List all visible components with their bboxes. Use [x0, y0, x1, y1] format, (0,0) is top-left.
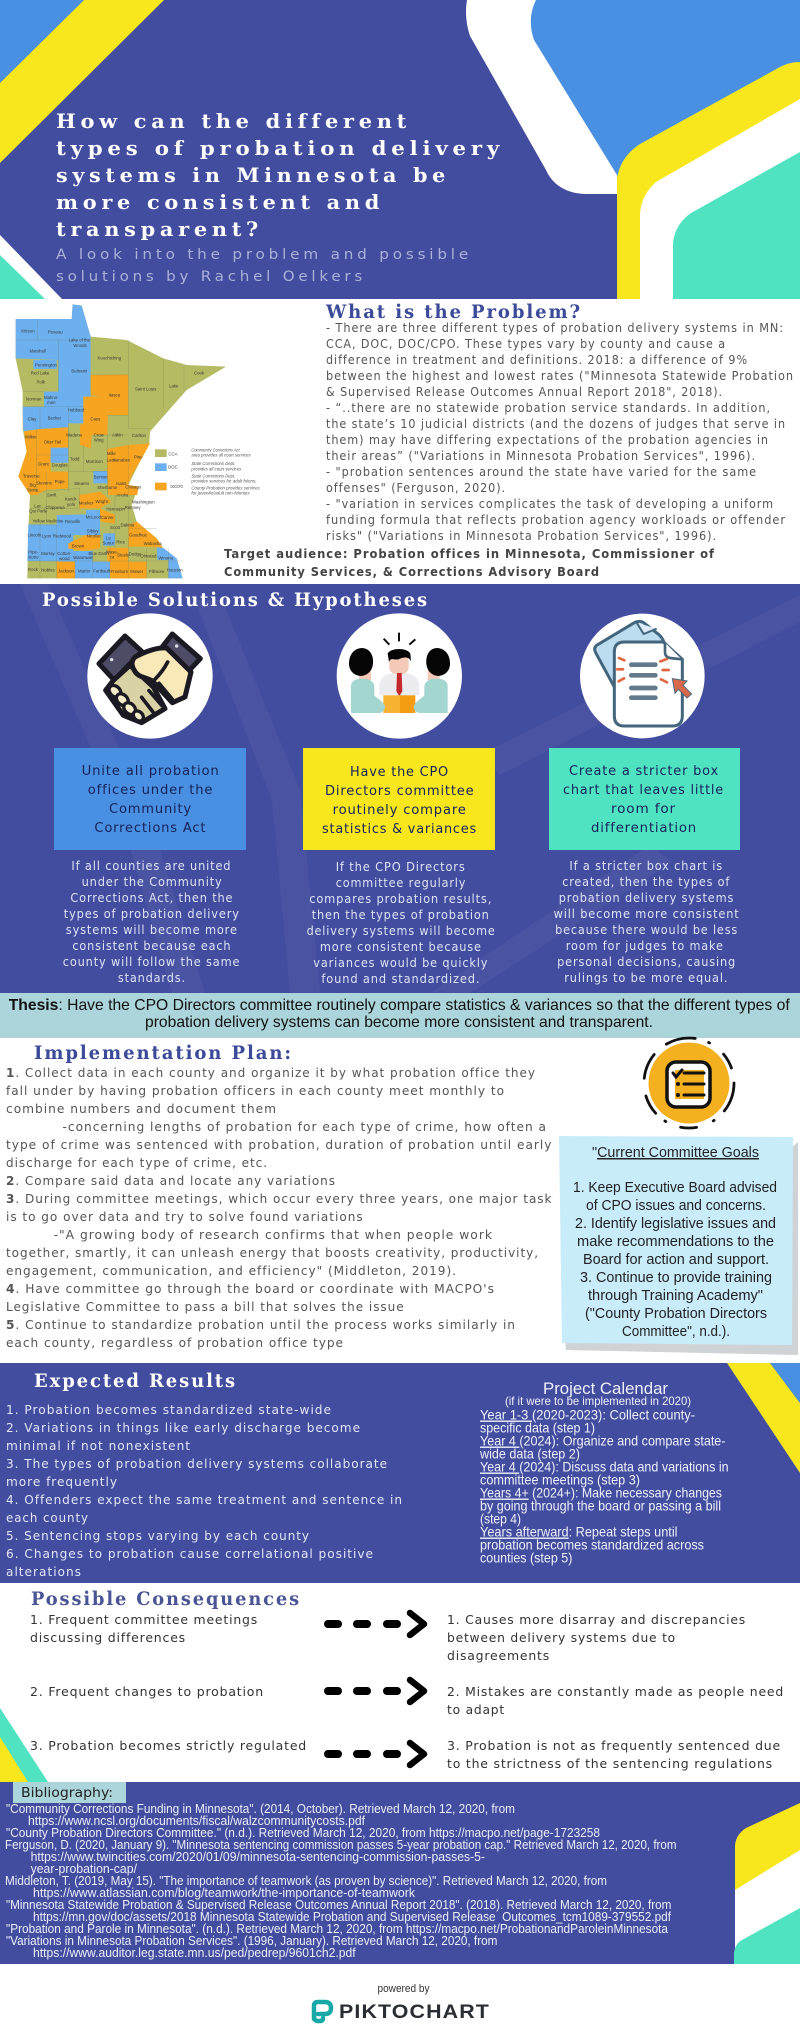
map: county labels: Mahno- [44, 395, 59, 400]
project calendar: by going through the board or passing a bill [480, 1498, 721, 1514]
map: county labels: Lake of the [69, 338, 91, 343]
map: county labels: Kittson [21, 328, 35, 333]
map legend [155, 448, 260, 495]
map: county labels: Nobles [41, 568, 55, 573]
callout: current committee goals: of CPO issues and concerns. [586, 1197, 766, 1214]
callout: current committee goals [559, 1136, 798, 1355]
problem text block: difference in treatment and definitions. 2018: a difference of 9% [326, 353, 748, 367]
map: DOC/CPO counties [18, 374, 163, 578]
consequence causes: 1. Frequent committee meetings [30, 1612, 258, 1627]
problem text block: offenses" (Ferguson, 2020). [326, 481, 506, 495]
hypothesis 1: Corrections Act, then the [70, 891, 233, 905]
map: county labels: Pine [134, 454, 143, 459]
map: county labels: Ramsey [125, 505, 141, 510]
map: county labels: Wabasha [144, 541, 162, 546]
map: county labels: Faribault [93, 568, 111, 573]
hypothesis 2: committee regularly [336, 876, 466, 890]
bibliography references: "Probation and Parole in Minnesota". (n.d.). Retrieved March 12, 2020, from https://macpo.net/ProbationandParoleinMinnesota [6, 1921, 669, 1936]
problem text block: funding formula that reflects probation agency workloads or offender [326, 513, 786, 527]
callout: current committee goals: make recommendations to the [577, 1233, 774, 1250]
map: county borders [16, 319, 184, 578]
expected results list: minimal if not nonexistent [6, 1438, 191, 1453]
solution box: stricter box chart: chart that leaves little [563, 783, 724, 798]
map: county labels: Winona [158, 556, 174, 561]
hypothesis 2: more consistent because [320, 940, 482, 954]
hypothesis 3: will become more consistent [554, 907, 740, 921]
map: county labels: Polk [36, 380, 46, 385]
expected results list [6, 1402, 403, 1579]
hypothesis 1: consistent because each [72, 939, 231, 953]
icon: committee meeting [337, 613, 462, 739]
bibliography label: Bibliography: [21, 1786, 113, 1801]
expected results list: 2. Variations in things like early discharge become [6, 1420, 361, 1435]
map: county labels: Scott [110, 525, 121, 530]
hypothesis 2: compares probation results, [309, 892, 492, 906]
map: county labels: Douglas [52, 462, 68, 467]
bibliography references: Ferguson, D. (2020, January 9). "Minnesota sentencing commission passes 5-year probation cap." Retrieved March 12, 2020, from [5, 1837, 676, 1852]
problem text block: - “..there are no statewide probation service standards. In addition, [326, 401, 771, 415]
map: county labels: Lacs [107, 458, 116, 463]
implementation steps: 5. Continue to standardize probation until the process works similarly in [6, 1317, 516, 1332]
header decoration: bottom-left corner [0, 235, 62, 299]
map: county labels: Renville [65, 519, 81, 524]
bibliography references: https://www.ncsl.org/documents/fiscal/walzcommunitycosts.pdf [28, 1813, 365, 1828]
callout: current committee goals: 3. Continue to provide training [580, 1269, 772, 1286]
map: county labels: Todd [70, 456, 80, 461]
consequence effects: 2. Mistakes are constantly made as people need [447, 1684, 784, 1699]
implementation steps: 4. Have committee go through the board or coordinate with MACPO's [6, 1281, 495, 1296]
map: county labels: Marshall [29, 348, 46, 353]
implementation steps: discharge for each type of crime, etc. [6, 1155, 268, 1170]
consequence effects: disagreements [447, 1648, 550, 1663]
map: county labels: Kanabec [113, 458, 131, 463]
map: county labels: Dodge [129, 552, 142, 557]
heading: implementation plan: Implementation Plan: [34, 1042, 293, 1064]
hypothesis 1: under the Community [82, 875, 223, 889]
map: county labels: Redwood [53, 534, 72, 539]
implementation steps: fall under by having probation officers in each county meet monthly to [6, 1083, 505, 1098]
map: county labels: Mower [130, 569, 144, 574]
solution box: unite offices: Community [109, 802, 192, 817]
arrow 1 [328, 1613, 424, 1635]
map: county labels: Becker [48, 416, 62, 421]
map: county labels: Martin [78, 568, 91, 573]
problem text block: risks" ("Variations in Minnesota Probation Services", 1996). [326, 529, 717, 543]
map: county labels: Steele [117, 552, 130, 557]
icon: handshake [87, 613, 213, 739]
footer: powered by Piktochart: powered by [378, 1983, 430, 1995]
heading: possible consequences: Possible Consequences [31, 1588, 301, 1610]
map: county labels: Wadena [66, 432, 83, 437]
map: county labels: Lincoln [27, 533, 42, 538]
map: county labels: Beltrami [71, 368, 87, 373]
implementation steps: 3. During committee meetings, which occur every three years, one major task [6, 1191, 552, 1206]
target audience: Target audience: Probation offices in Minnesota, Commissioner of [224, 547, 715, 561]
title: transparent? [56, 217, 263, 241]
bibliography references: year-probation-cap/ [31, 1861, 137, 1876]
hypothesis 3: room for judges to make [566, 939, 724, 953]
expected results list: 6. Changes to probation cause correlational positive [6, 1546, 374, 1561]
callout: current committee goals: ("County Probation Directors [585, 1305, 767, 1322]
map: county labels: wood [59, 556, 70, 561]
map: county labels: Swift [47, 492, 57, 497]
map: county labels: Le [106, 535, 111, 540]
title: types of probation delivery [56, 136, 504, 160]
expected results list: each county [6, 1510, 89, 1525]
map: county labels: Pipe- [28, 549, 39, 554]
consequence effects: to the strictness of the sentencing regulations [447, 1756, 773, 1771]
project calendar: Years afterward: Repeat steps until [480, 1524, 678, 1540]
hypothesis 3: rulings to be more equal. [564, 971, 728, 985]
map: county labels: Sibley [87, 528, 99, 533]
project calendar: specific data (step 1) [480, 1420, 595, 1436]
map: county labels: Roseau [48, 330, 63, 335]
map legend: provides services for adult felons; [190, 479, 257, 484]
map: county labels: Stearns [74, 481, 89, 486]
hypothesis 1: If all counties are united [71, 859, 231, 873]
panel: possible consequences [0, 1588, 784, 1782]
problem text block: their areas” ("Variations in Minnesota Probation Services", 1996). [326, 449, 756, 463]
map: county labels: Sherburne [97, 485, 118, 490]
bibliography references: https://mn.gov/doc/assets/2018 Minnesota Statewide Probation and Supervised Release Outcomes_tcm1089-379552.pdf [33, 1909, 671, 1924]
map: county labels: Qui Parle [29, 508, 48, 513]
map: county labels: Fillmore [149, 569, 165, 574]
map legend: area provides all court services [191, 453, 251, 458]
map: county labels: Crow [94, 432, 105, 437]
map: county labels: stone [28, 554, 39, 559]
hypothesis 1: standards. [118, 971, 186, 985]
map: county labels: Traverse [23, 474, 40, 479]
implementation steps: engagement, communication, and efficiency" (Middleton, 2019). [6, 1263, 457, 1278]
map: county labels: Jackson [58, 568, 75, 573]
map: county labels: McLeod [86, 514, 102, 519]
implementation steps [6, 1065, 552, 1350]
map: county labels: Wilkin [25, 434, 37, 439]
consequence causes: 2. Frequent changes to probation [30, 1684, 264, 1699]
bibliography references: https://www.twincities.com/2020/01/09/minnesota-sentencing-commission-passes-5- [31, 1849, 485, 1864]
callout: current committee goals: "Current Committee Goals [592, 1144, 759, 1161]
map: county labels: Sueur [103, 540, 115, 545]
expected results list: alterations [6, 1564, 82, 1579]
solution box: unite offices: offices under the [88, 783, 213, 798]
implementation steps: each county, regardless of probation office type [6, 1335, 344, 1350]
map: county labels: Rice [116, 540, 126, 545]
map legend: DOC/CPO [170, 484, 183, 489]
bibliography references: https://www.atlassian.com/blog/teamwork/the-importance-of-teamwork [33, 1885, 415, 1900]
expected results list: 4. Offenders expect the same treatment and sentence in [6, 1492, 403, 1507]
bibliography references: "Community Corrections Funding in Minnesota". (2014, October). Retrieved March 12, 2020, from [6, 1801, 515, 1816]
target audience: Community Services, & Corrections Advisory Board [224, 565, 600, 579]
expected results list: more frequently [6, 1474, 118, 1489]
solution box: CPO directors committee: statistics & variances [322, 822, 477, 837]
panel: thesis: Thesis: Have the CPO Directors committee routinely compare statistics & variances so that the different types of [9, 997, 790, 1014]
map: county labels: Hubbard [68, 408, 85, 413]
map legend: provides all court services [190, 466, 242, 471]
problem text block [326, 321, 794, 543]
decoration: bottom-left stripes [0, 1708, 48, 1782]
map: county labels: yohi [67, 502, 75, 507]
problem text block: - "variation in services complicates the task of developing a uniform [326, 497, 774, 511]
map legend: Community Corrections Act [191, 448, 240, 453]
hypothesis 2: then the types of probation [312, 908, 490, 922]
hypothesis 2: variances would be quickly [313, 956, 488, 970]
bibliography references: Middleton, T. (2019, May 15). "The importance of teamwork (as proven by science)". Retrieved March 12, 2020, from [5, 1873, 607, 1888]
hypothesis 1: types of probation delivery [64, 907, 240, 921]
map legend: CCA [168, 451, 178, 456]
project calendar [479, 1379, 729, 1566]
hypothesis 3: because there would be less [555, 923, 738, 937]
map: county labels: Murray [41, 551, 56, 556]
expected results list: 1. Probation becomes standardized state-wide [6, 1402, 332, 1417]
panel: expected results and project calendar [0, 1363, 800, 1583]
bibliography references: "Minnesota Statewide Probation & Supervised Release Outcomes Annual Report 2018". (2018). Retrieved March 12, 2020, from [6, 1897, 671, 1912]
panel: what is the problem [16, 301, 794, 579]
map: county labels: Anoka [116, 492, 129, 497]
map: DOC counties [16, 304, 183, 578]
project calendar: wide data (step 2) [479, 1446, 580, 1462]
expected results list: 5. Sentencing stops varying by each county [6, 1528, 310, 1543]
map of Minnesota probation delivery systems [16, 304, 260, 578]
subtitle: A look into the problem and possible [56, 247, 472, 263]
bibliography label [13, 1782, 126, 1803]
hypothesis 3: If a stricter box chart is [569, 859, 723, 873]
map: county labels: ca [110, 554, 115, 559]
consequence effects [447, 1612, 784, 1771]
icon: Piktochart logo [314, 2002, 331, 2021]
map legend: State Corrections Dept. [191, 461, 235, 466]
project calendar: Year 1-3 (2020-2023): Collect county- [480, 1406, 695, 1422]
map legend: for juvenile/adult non-felonies [191, 490, 251, 495]
implementation steps: 1. Collect data in each county and organize it by what probation office they [6, 1065, 536, 1080]
callout: current committee goals: 2. Identify legislative issues and [575, 1215, 776, 1232]
consequence effects: 3. Probation is not as frequently sentenced due [447, 1738, 781, 1753]
problem text block: - "probation sentences around the state have varied for the same [326, 465, 757, 479]
map: county labels: Freeborn [111, 569, 129, 574]
expected results list: 3. The types of probation delivery systems collaborate [6, 1456, 388, 1471]
hypothesis 2: delivery systems will become [307, 924, 496, 938]
project calendar: committee meetings (step 3) [480, 1472, 640, 1488]
map: county labels: Saint Louis [135, 386, 156, 391]
map: county labels: Wing [94, 438, 104, 443]
map: county labels: Lyon [42, 533, 52, 538]
map: county labels: Koochiching [98, 356, 122, 361]
map: county labels: Carlton [132, 433, 147, 438]
map: county labels: Blue Earth [89, 551, 109, 556]
solution box: stricter box chart: Create a stricter box [569, 764, 719, 779]
hypothesis 2: found and standardized. [321, 972, 480, 986]
map: county labels: Lac [34, 504, 42, 509]
panel: bibliography [0, 1782, 800, 1964]
map: county labels: Wase- [106, 549, 119, 554]
map legend: County Probation provides services [191, 485, 260, 490]
map: county labels: Chippewa [45, 505, 65, 510]
map legend: State Corrections Dept. [191, 474, 235, 479]
callout: current committee goals: Committee", n.d.). [622, 1323, 730, 1340]
project calendar: Project Calendar [543, 1379, 668, 1398]
problem text block: them) may have differing expectations of the probation agencies in [326, 433, 769, 447]
bibliography references [5, 1801, 676, 1960]
implementation steps: is to go over data and try to solve found variations [6, 1209, 364, 1224]
hypothesis 1 [63, 859, 240, 985]
consequence causes: 3. Probation becomes strictly regulated [30, 1738, 307, 1753]
project calendar: probation becomes standardized across [480, 1536, 704, 1552]
heading: expected results: Expected Results [34, 1370, 237, 1392]
map: county labels: Carver [101, 515, 114, 520]
map: county labels: Brown [72, 544, 85, 549]
callout: current committee goals: 1. Keep Executive Board advised [573, 1179, 777, 1196]
map: county labels: Cotton- [57, 551, 72, 556]
map: county labels: Stevens [36, 480, 52, 485]
map: county labels: Cass [90, 416, 100, 421]
problem text block: & Supervised Release Outcomes Annual Report 2018", 2018). [326, 385, 723, 399]
title: How can the different [56, 109, 411, 133]
target audience [224, 547, 715, 579]
map: county labels: Watonwan [73, 555, 94, 560]
panel: thesis [0, 993, 800, 1038]
map base: CCA counties [16, 304, 226, 578]
consequence causes [30, 1612, 307, 1753]
icon: document [580, 614, 705, 738]
heading: solutions: Possible Solutions & Hypotheses [42, 589, 429, 611]
consequence effects: 1. Causes more disarray and discrepancies [447, 1612, 746, 1627]
subtitle: solutions by Rachel Oelkers [56, 269, 366, 285]
map: county labels: Nicollet [87, 534, 102, 539]
callout: current committee goals: Board for action and support. [583, 1251, 769, 1268]
decoration: right rounded stripes [734, 1803, 800, 1964]
implementation steps: together, smartly, it can unleash energy that boosts creativity, productivity, [6, 1245, 539, 1260]
map: county labels: Red Lake [31, 371, 50, 376]
icon: checklist badge [644, 1038, 734, 1128]
bibliography references: "County Probation Directors Committee." (n.d.). Retrieved March 12, 2020, from https://macpo.net/page-1723258 [6, 1825, 600, 1840]
solution box: stricter box chart: room for [611, 802, 676, 817]
map: county labels: Goodhue [129, 533, 147, 538]
solution box: CPO directors committee: routinely compare [333, 803, 467, 818]
map legend: DOC [168, 465, 178, 470]
panel: header [0, 0, 800, 299]
map: county labels: Benton [94, 474, 108, 479]
panel: thesis: probation delivery systems can become more consistent and transparent. [145, 1014, 653, 1031]
hypothesis 2: If the CPO Directors [336, 860, 466, 874]
footer: powered by Piktochart [314, 1983, 490, 2023]
project calendar: Year 4 (2024): Discuss data and variations in [480, 1458, 729, 1474]
hypothesis 3 [554, 859, 740, 985]
solution box: CPO directors committee [303, 748, 495, 850]
bibliography references: "Variations in Minnesota Probation Services". (1996, January). Retrieved March 12, 2020, from [6, 1933, 497, 1948]
decoration: top-right stripes [727, 1363, 800, 1473]
map: county labels: Houston [167, 568, 183, 573]
header decoration: top-left stripes [0, 0, 164, 163]
map: county labels: Yellow Medicine [33, 518, 64, 523]
map: county labels: men [47, 400, 56, 405]
solution box: unite offices [54, 748, 246, 850]
map: county labels: Dakota [120, 523, 135, 528]
consequence causes: discussing differences [30, 1630, 186, 1645]
solution box: stricter box chart [549, 748, 740, 850]
bibliography references: https://www.auditor.leg.state.mn.us/ped/pedrep/9601ch2.pdf [33, 1945, 356, 1960]
map: county labels: Otter Tail [44, 440, 61, 445]
map: county labels: Hennepin [106, 506, 126, 511]
project calendar: (if it were to be implemented in 2020) [505, 1394, 691, 1408]
callout: current committee goals: through Training Academy" [588, 1287, 763, 1304]
Piktochart wordmark: PIKTOCHART [339, 2002, 490, 2023]
implementation steps: Legislative Committee to pass a bill that solves the issue [6, 1299, 405, 1314]
panel: possible solutions and hypotheses [0, 584, 800, 993]
map: county labels: Norman [26, 396, 42, 401]
panel: implementation plan [6, 1038, 798, 1355]
arrow 2 [328, 1680, 424, 1702]
map: county labels: Kandi- [65, 496, 78, 501]
problem text block: CCA, DOC, DOC/CPO. These types vary by county and cause a [326, 337, 726, 351]
hypothesis 1: systems will become more [66, 923, 238, 937]
solution box: CPO directors committee: Directors committee [325, 784, 474, 799]
title: systems in Minnesota be [56, 163, 450, 187]
map: county labels: Morrison [86, 459, 103, 464]
map: county labels: Mille [107, 451, 116, 456]
map: county labels: Stone [27, 488, 39, 493]
solution box: unite offices: Unite all probation [82, 764, 220, 779]
map: county labels: Pope [55, 479, 65, 484]
project calendar: counties (step 5) [480, 1550, 572, 1566]
hypothesis 3: probation delivery systems [559, 891, 734, 905]
map: county labels: Wright [95, 499, 109, 504]
title: more consistent and [56, 190, 384, 214]
implementation steps: 2. Compare said data and locate any variations [6, 1173, 336, 1188]
map: county labels: Grant [38, 462, 50, 467]
map: county labels: Woods [73, 343, 87, 348]
project calendar: (step 4) [480, 1510, 521, 1526]
map: county labels: Itasca [109, 392, 121, 397]
problem text block: - There are three different types of probation delivery systems in MN: [326, 321, 784, 335]
map: county labels: Big [30, 483, 36, 488]
map: county labels: Clay [28, 416, 37, 421]
solution box: unite offices: Corrections Act [94, 821, 206, 836]
title [56, 109, 504, 241]
solution box: stricter box chart: differentiation [591, 821, 697, 836]
hypothesis 3: personal decisions, causing [557, 955, 736, 969]
implementation steps: type of crime was sentenced with probation, duration of probation until early [6, 1137, 552, 1152]
implementation steps: -concerning lengths of probation for each type of crime, how often a [62, 1119, 547, 1134]
map: county labels: Meeker [79, 500, 94, 505]
map: county labels: Pennington [35, 362, 58, 367]
hypothesis 3: created, then the types of [562, 875, 730, 889]
project calendar: Year 4 (2024): Organize and compare state- [480, 1432, 726, 1448]
consequence effects: to adapt [447, 1702, 505, 1717]
map: county labels [21, 328, 205, 574]
map: county labels: Olmsted [140, 554, 157, 559]
map: county labels: Rock [28, 567, 39, 572]
project calendar: Years 4+ (2024+): Make necessary changes [480, 1484, 722, 1500]
map: county labels: Cook [194, 370, 205, 375]
consequence effects: between delivery systems due to [447, 1630, 676, 1645]
map: county labels: Chisago [125, 484, 142, 489]
header decoration: top-right rounded shapes [466, 0, 800, 299]
subtitle [56, 247, 472, 285]
heading: what is the problem: What is the Problem? [325, 301, 582, 323]
map: county labels: Aitkin [112, 432, 123, 437]
map: county labels: Washington [132, 500, 155, 505]
hypothesis 1: county will follow the same [63, 955, 240, 969]
solution box: CPO directors committee: Have the CPO [350, 765, 449, 780]
map: county labels: Isanti [116, 481, 127, 486]
implementation steps: combine numbers and document them [6, 1101, 277, 1116]
implementation steps: -"A growing body of research confirms that when people work [54, 1227, 493, 1242]
arrow 3 [328, 1743, 424, 1765]
map: county labels: Lake [169, 384, 179, 389]
hypothesis 2 [307, 860, 496, 986]
